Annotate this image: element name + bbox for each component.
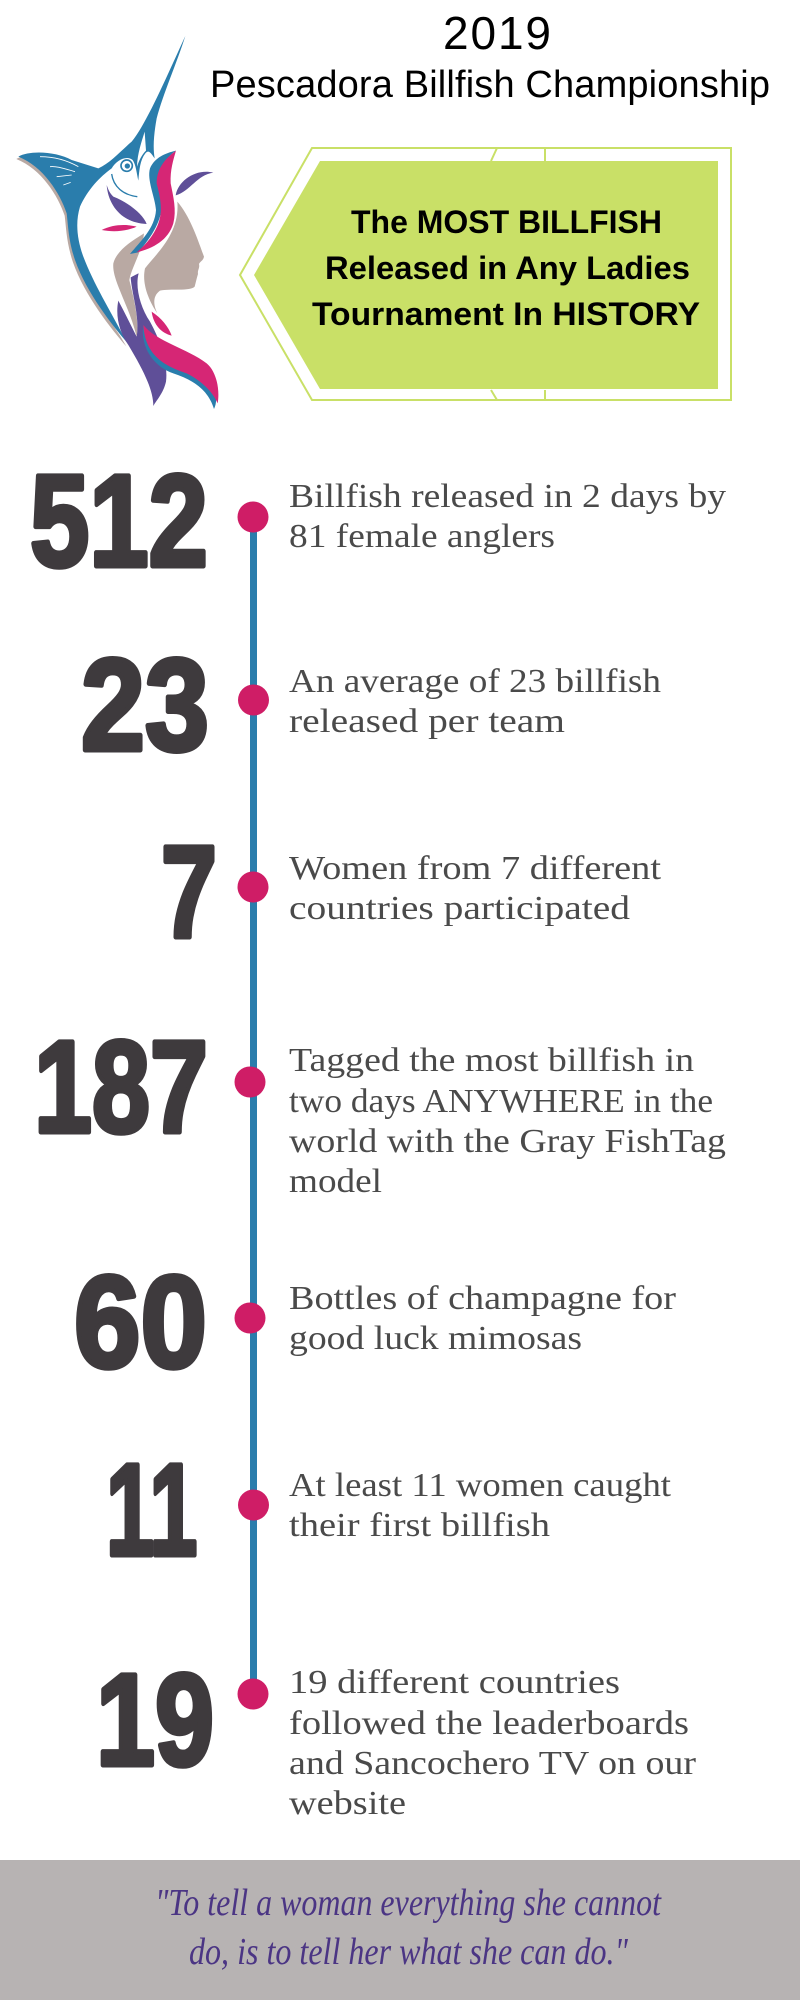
footer quote band xyxy=(0,1860,800,2000)
description xyxy=(289,478,726,555)
number: 11 xyxy=(106,1437,197,1583)
timeline dot xyxy=(238,872,268,902)
description xyxy=(289,850,662,927)
description: good luck mimosas xyxy=(289,1320,582,1357)
number: 187 xyxy=(34,1015,208,1161)
banner text: Tournament In HISTORY xyxy=(312,296,700,332)
description: followed the leaderboards xyxy=(289,1705,689,1742)
timeline dot xyxy=(234,1302,266,1334)
number: 19 xyxy=(96,1647,214,1794)
banner: green arrow callout xyxy=(240,148,731,400)
description: countries participated xyxy=(289,890,630,927)
description: An average of 23 billfish xyxy=(289,663,661,700)
stat: 60 xyxy=(74,1248,677,1395)
description: their first billfish xyxy=(289,1507,550,1544)
timeline dot xyxy=(238,684,269,716)
quote text xyxy=(155,1882,662,1973)
timeline dot xyxy=(238,1490,269,1520)
banner text: The MOST BILLFISH xyxy=(351,204,662,240)
description: At least 11 women caught xyxy=(289,1467,672,1504)
timeline dot xyxy=(238,1678,268,1710)
number: 60 xyxy=(74,1248,207,1395)
description: two days ANYWHERE in the xyxy=(289,1083,713,1120)
description xyxy=(289,1664,697,1822)
icon: marlin and woman logo xyxy=(16,36,218,409)
quote text: do, is to tell her what she can do." xyxy=(189,1931,629,1973)
title: Pescadora Billfish Championship xyxy=(210,64,770,106)
banner text xyxy=(312,204,700,332)
description: Women from 7 different xyxy=(289,850,662,887)
description: model xyxy=(289,1163,382,1200)
title xyxy=(210,7,770,106)
description: released per team xyxy=(289,703,565,740)
quote text: "To tell a woman everything she cannot xyxy=(155,1882,662,1924)
description xyxy=(289,1042,726,1200)
timeline line xyxy=(250,517,257,1694)
banner text: Released in Any Ladies xyxy=(325,250,690,286)
description: and Sancochero TV on our xyxy=(289,1745,697,1782)
stat: 11 xyxy=(106,1437,672,1583)
banner outline xyxy=(240,148,731,400)
description: Billfish released in 2 days by xyxy=(289,478,726,515)
description xyxy=(289,1467,672,1544)
number: 23 xyxy=(81,632,209,779)
description: world with the Gray FishTag xyxy=(289,1123,726,1160)
timeline dot xyxy=(234,1066,266,1098)
description: website xyxy=(289,1785,406,1822)
description: Tagged the most billfish in xyxy=(289,1042,694,1079)
stat: 512 xyxy=(30,449,726,595)
description xyxy=(289,1280,677,1357)
number: 7 xyxy=(161,818,217,965)
description: 19 different countries xyxy=(289,1664,620,1701)
stat: 7 xyxy=(161,818,662,965)
stat: 19 xyxy=(96,1647,697,1822)
title: 2019 xyxy=(443,7,551,59)
description xyxy=(289,663,661,740)
number: 512 xyxy=(30,449,208,595)
stat: 187 xyxy=(34,1015,726,1200)
timeline dot xyxy=(238,502,268,532)
banner fill xyxy=(254,161,718,389)
description: Bottles of champagne for xyxy=(289,1280,677,1317)
stat: 23 xyxy=(81,632,661,779)
description: 81 female anglers xyxy=(289,518,555,555)
